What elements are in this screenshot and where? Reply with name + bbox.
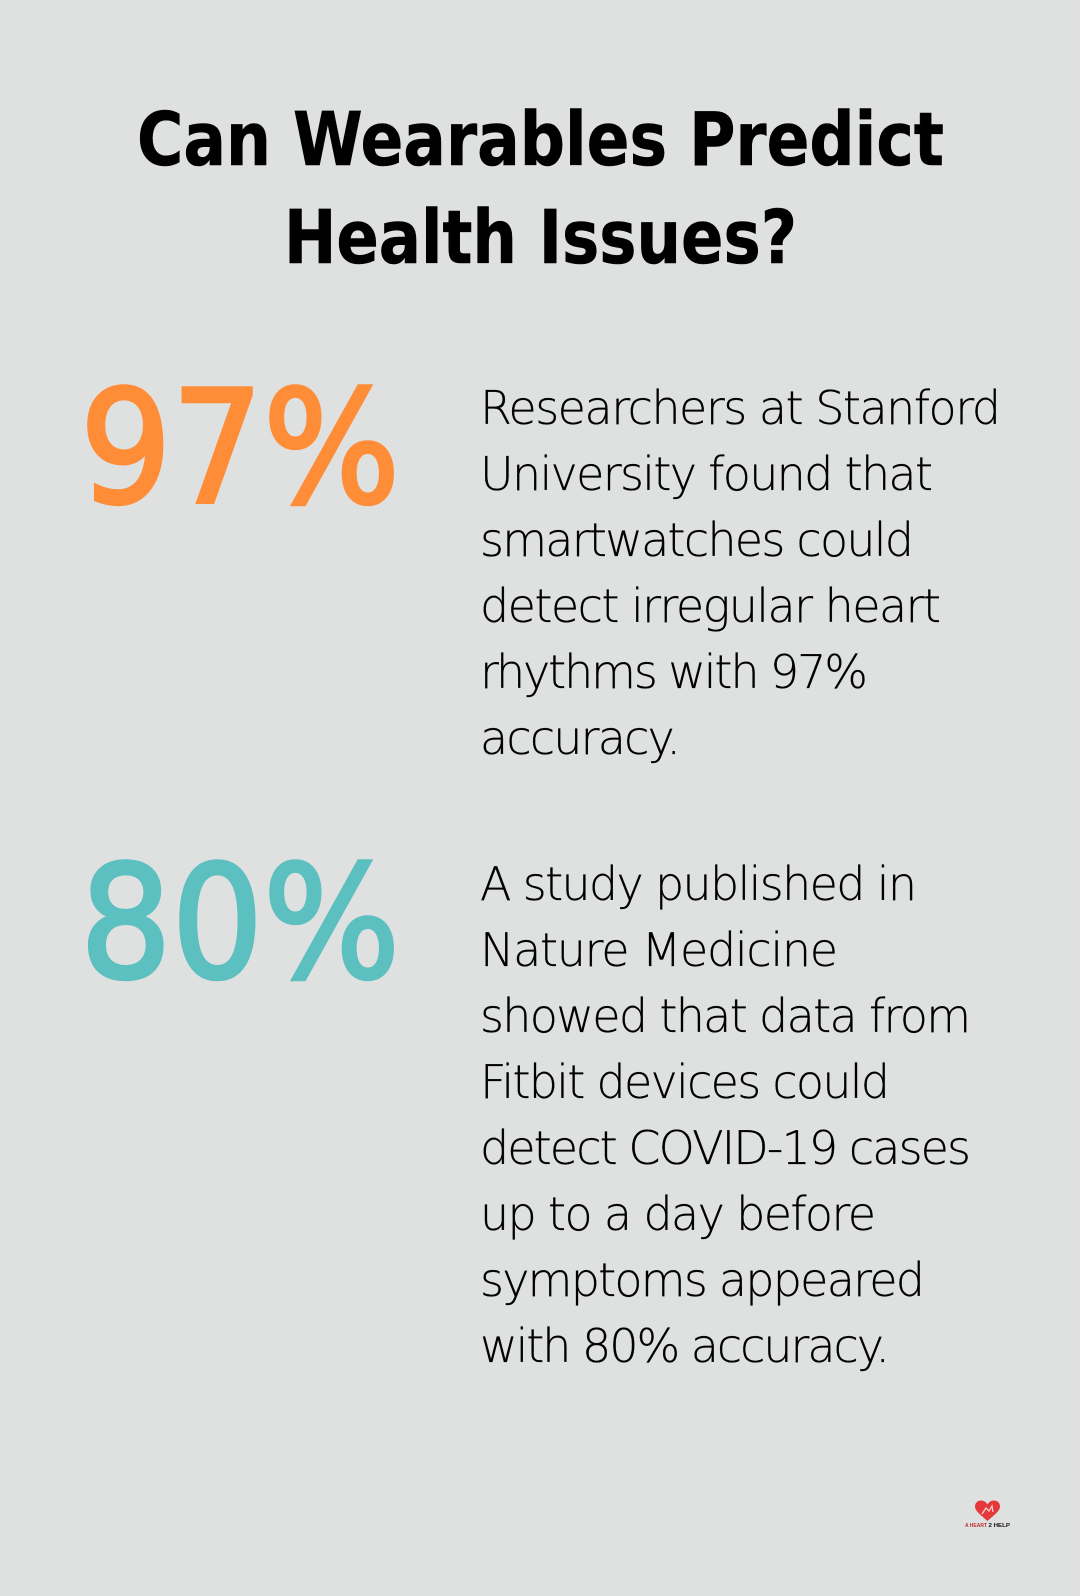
text block: Nature Medicine Fitbit study: [480, 857, 971, 1373]
stat: 97%: 97%: [80, 357, 400, 539]
text block: Nature Medicine Fitbit study: showed that data from: [480, 989, 971, 1043]
logo wordmark: A HEART: [965, 1523, 988, 1529]
icon: helping hands mark: [982, 1506, 993, 1514]
logo wordmark: 2 HELP: [988, 1523, 1010, 1529]
stat: 80%: 80%: [80, 832, 400, 1014]
text block: Stanford smartwatch finding: Researchers at Stanford: [480, 381, 1001, 435]
text block: Nature Medicine Fitbit study: Fitbit devices could: [480, 1055, 890, 1109]
logo: A Heart 2 Help: [965, 1500, 1010, 1529]
text block: Nature Medicine Fitbit study: A study published in: [480, 857, 917, 911]
logo wordmark: [965, 1523, 1010, 1529]
text block: Stanford smartwatch finding: rhythms with 97%: [480, 645, 868, 699]
title: [137, 97, 944, 281]
text block: Nature Medicine Fitbit study: up to a day before: [480, 1187, 876, 1241]
text block: Stanford smartwatch finding: [480, 381, 1001, 765]
text block: Nature Medicine Fitbit study: with 80% accuracy.: [480, 1319, 890, 1373]
text block: Stanford smartwatch finding: detect irregular heart: [480, 579, 941, 633]
text block: Nature Medicine Fitbit study: Nature Medicine: [480, 923, 838, 977]
text block: Nature Medicine Fitbit study: symptoms appeared: [480, 1253, 925, 1307]
text block: Stanford smartwatch finding: accuracy.: [480, 711, 681, 765]
icon: red heart: [975, 1500, 1000, 1521]
title: Can Wearables Predict: [137, 97, 944, 183]
text block: Stanford smartwatch finding: smartwatches could: [480, 513, 914, 567]
text block: Nature Medicine Fitbit study: detect COVID-19 cases: [480, 1121, 971, 1175]
text block: Stanford smartwatch finding: University found that: [480, 447, 933, 501]
title: Health Issues?: [284, 195, 797, 281]
